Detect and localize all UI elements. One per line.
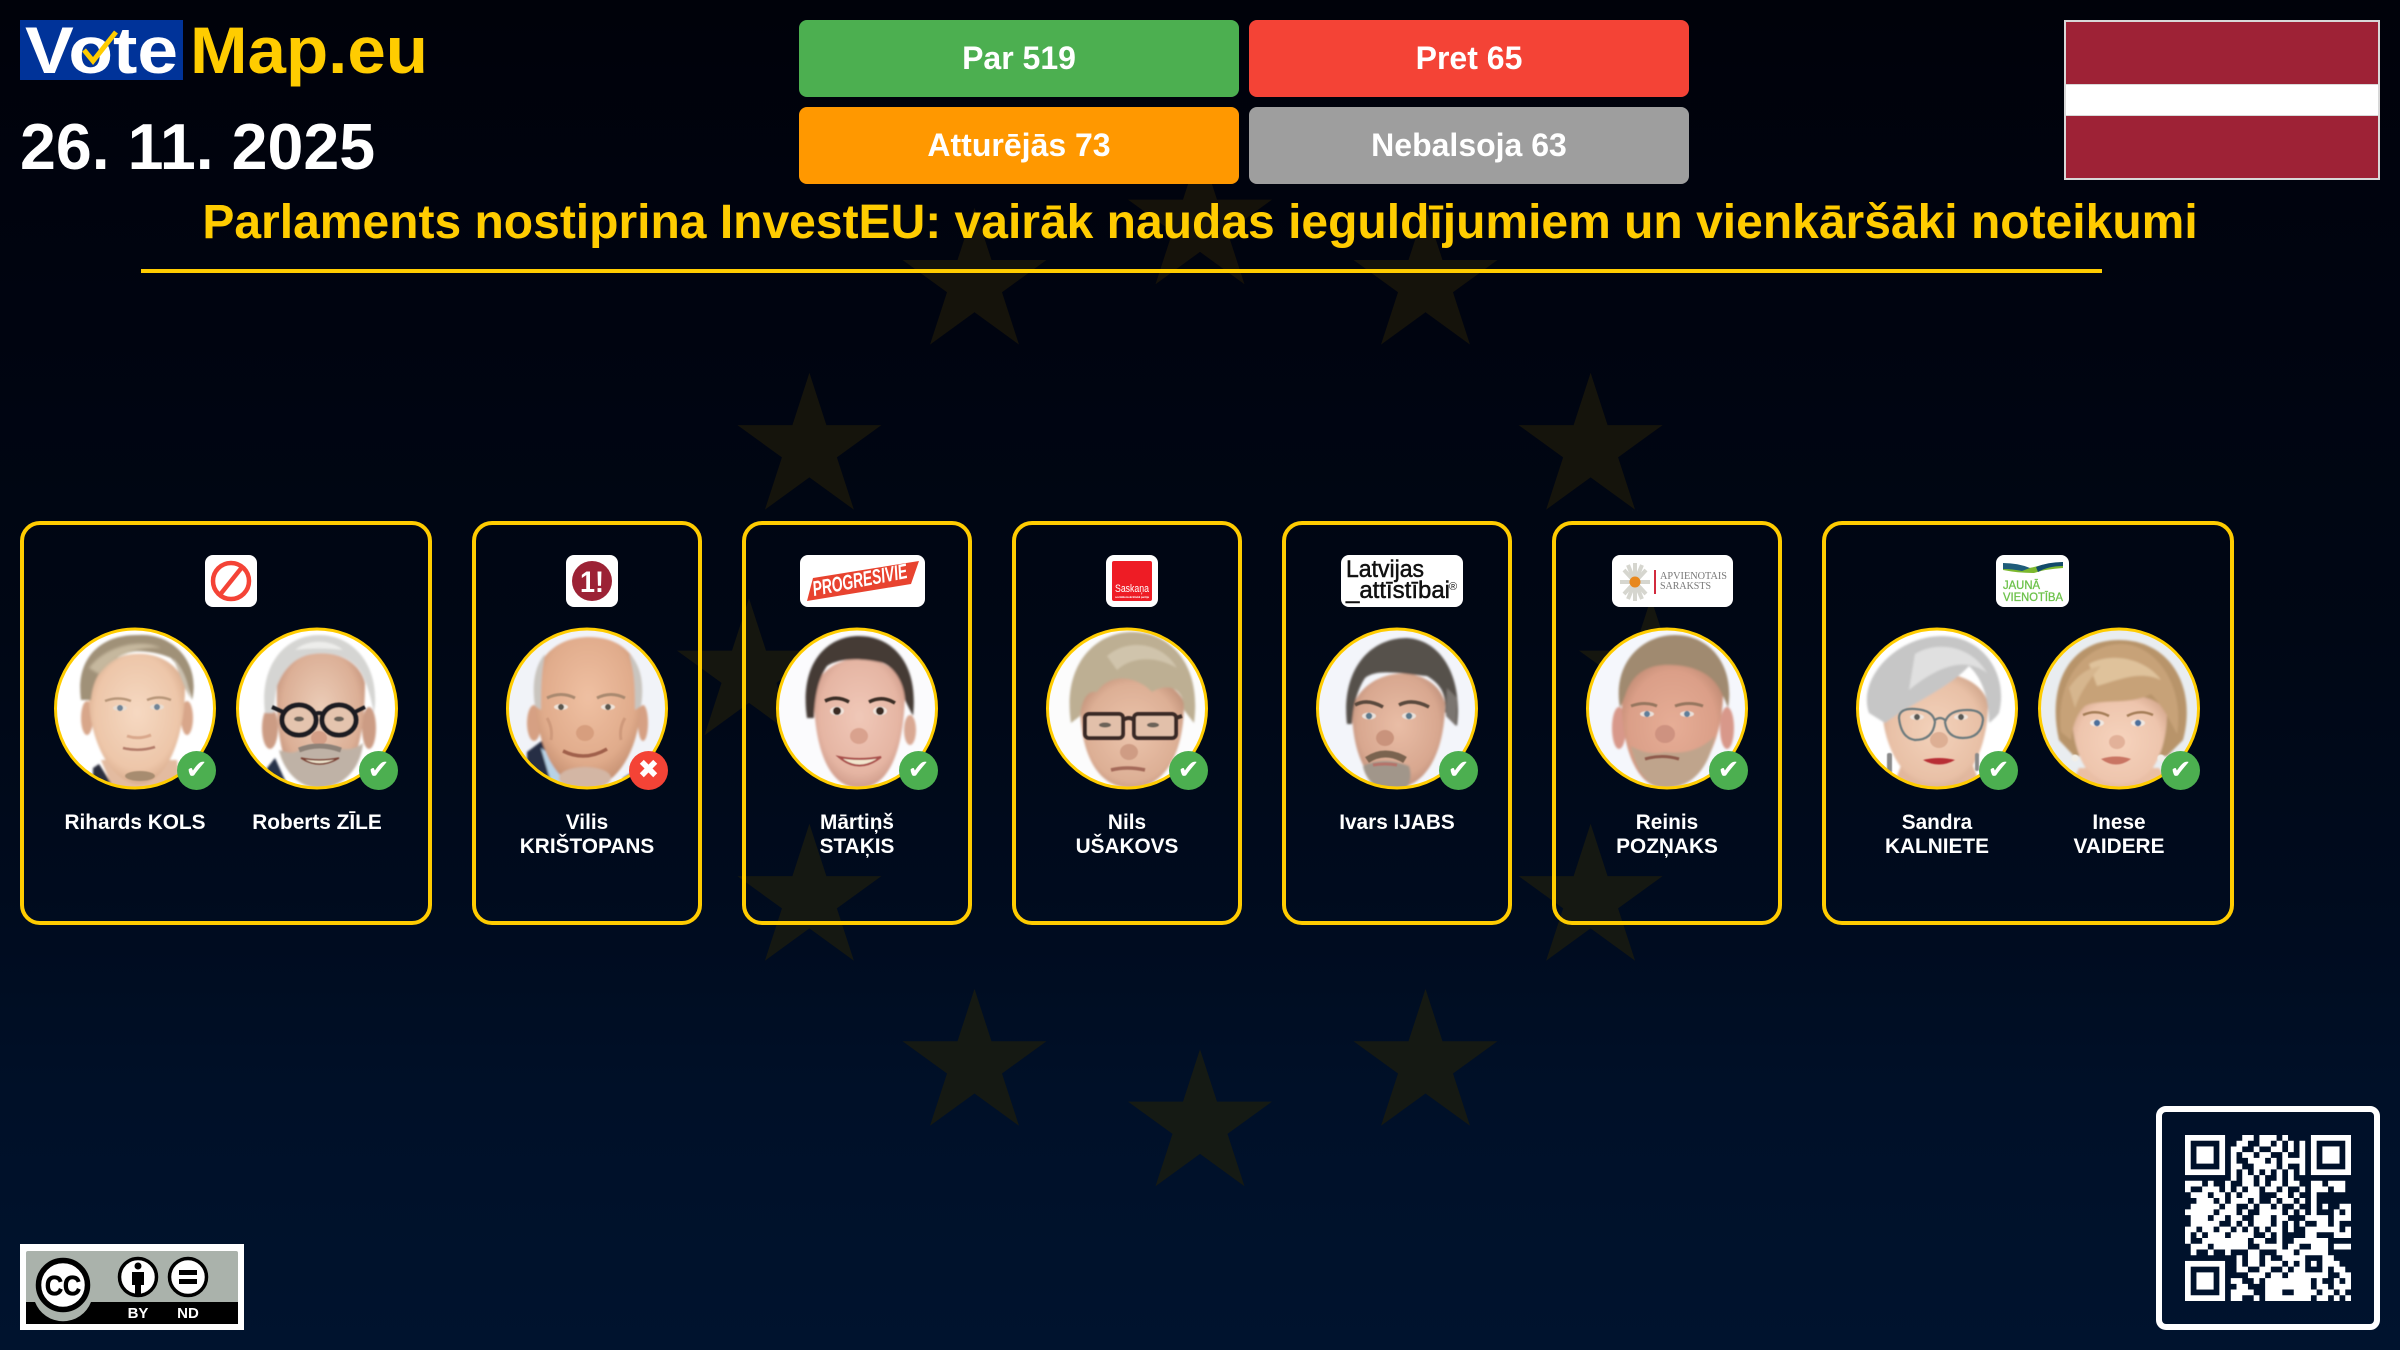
name: Staķis: Mārtiņš [820, 811, 894, 834]
photo: Rihards Kols [54, 628, 216, 790]
vote count: did not vote: Nebalsoja 63 [1371, 127, 1567, 163]
vote count: against [1249, 20, 1689, 97]
license badge: CC BY-ND [20, 1244, 244, 1330]
icon: party logo Latvijas attīstībai: Latvijas [1346, 556, 1424, 583]
icon: party logo Apvienotais saraksts [1612, 555, 1733, 607]
name: Ušakovs [1076, 811, 1178, 858]
vote badge: Vaidere for: ✔ [2170, 755, 2191, 785]
title: Parlaments nostiprina InvestEU: vairāk naudas ieguldījumiem un vienkāršāki noteikumi [202, 196, 2198, 248]
vote badge: Staķis for: ✔ [908, 755, 929, 785]
name: Vaidere [2074, 811, 2164, 858]
flag: Latvia [2064, 20, 2380, 180]
name: Vaidere: VAIDERE [2074, 835, 2164, 858]
vote badge: Ušakovs for [1169, 751, 1208, 790]
icon: party logo Saskaņa [1106, 555, 1158, 607]
name: Krištopans: KRIŠTOPANS [520, 835, 654, 858]
icon: party logo Apvienotais saraksts: SARAKSTS [1660, 581, 1711, 592]
name: Pozņaks: Reinis [1636, 811, 1698, 834]
icon: party logo Latvijas attīstībai: ® [1449, 581, 1457, 593]
name: Ušakovs: Nils [1108, 811, 1146, 834]
vote badge: Vaidere for [2161, 751, 2200, 790]
vote count: for: Par 519 [962, 40, 1076, 76]
vote badge: Kols for [177, 751, 216, 790]
photo: Mārtiņš Staķis [776, 628, 938, 790]
name: Krištopans [520, 811, 654, 858]
panel: Latvia First card [472, 521, 702, 925]
icon: party logo Jaunā Vienotība: JAUNĀ [2003, 578, 2040, 592]
name: Kalniete: KALNIETE [1885, 835, 1989, 858]
name: Staķis: STAĶIS [820, 835, 894, 858]
vote count: abstained: Atturējās 73 [927, 127, 1111, 163]
name: Ijabs: Ivars IJABS [1339, 811, 1455, 834]
panel: Progresīvie card [742, 521, 972, 925]
QR code [2156, 1106, 2380, 1330]
icon: party logo Saskaņa: Saskaņa [1115, 583, 1150, 595]
vote badge: Krištopans against: ✖ [638, 755, 659, 785]
name: Zīle: Roberts ZĪLE [252, 811, 382, 834]
photo: Nils Ušakovs [1046, 628, 1208, 790]
icon: party logo Apvienotais saraksts: APVIENOTAIS [1660, 571, 1727, 582]
name: Krištopans: Vilis [566, 811, 608, 834]
vote badge: Pozņaks for: ✔ [1718, 755, 1739, 785]
date: 26. 11. 2025 [20, 111, 375, 183]
vote count: for [799, 20, 1239, 97]
vote badge: Zīle for: ✔ [368, 755, 389, 785]
icon: party logo Latvia First [566, 555, 618, 607]
license badge: CC BY-ND: ND [177, 1305, 199, 1322]
icon: party logo prohibition sign [205, 555, 257, 607]
icon: party logo Jaunā Vienotība [1996, 555, 2069, 607]
icon: party logo Jaunā Vienotība: VIENOTĪBA [2003, 590, 2063, 604]
vote badge: Zīle for [359, 751, 398, 790]
vote count: did not vote [1249, 107, 1689, 184]
panel: Saskaņa card [1012, 521, 1242, 925]
vote count: abstained [799, 107, 1239, 184]
photo: Ivars Ijabs [1316, 628, 1478, 790]
vote count: against: Pret 65 [1416, 40, 1522, 76]
panel: non-attached card [20, 521, 432, 925]
name: Kols: Rihards KOLS [64, 811, 205, 834]
icon: party logo Latvijas attīstībai [1341, 555, 1463, 607]
panel: Jaunā Vienotība card [1822, 521, 2234, 925]
icon: party logo Latvijas attīstībai: _attīstībai [1345, 577, 1450, 604]
photo: Reinis Pozņaks [1586, 628, 1748, 790]
panel: Latvijas attīstībai card [1282, 521, 1512, 925]
name: Kalniete: Sandra [1902, 811, 1972, 834]
vote badge: Kalniete for [1979, 751, 2018, 790]
vote badge: Pozņaks for [1709, 751, 1748, 790]
panel: Apvienotais saraksts card [1552, 521, 1782, 925]
vote badge: Kols for: ✔ [186, 755, 207, 785]
vote badge: Kalniete for: ✔ [1988, 755, 2009, 785]
vote badge: Ijabs for [1439, 751, 1478, 790]
photo: Sandra Kalniete [1856, 628, 2018, 790]
license badge: CC BY-ND: BY [128, 1305, 148, 1322]
name: Ušakovs: UŠAKOVS [1076, 835, 1178, 858]
name: Vaidere: Inese [2092, 811, 2146, 834]
photo: Inese Vaidere [2038, 628, 2200, 790]
license badge: CC BY-ND: CC [45, 1270, 81, 1301]
vote badge: Ušakovs for: ✔ [1178, 755, 1199, 785]
photo: Roberts Zīle [236, 628, 398, 790]
name: Pozņaks: POZŅAKS [1616, 835, 1718, 858]
name: Pozņaks [1616, 811, 1718, 858]
name: Kalniete [1885, 811, 1989, 858]
vote badge: Krištopans against [629, 751, 668, 790]
icon: party logo Latvia First: 1! [580, 566, 604, 599]
vote badge: Staķis for [899, 751, 938, 790]
icon: party logo Saskaņa: sociāldemokrātiskā partija [1115, 595, 1149, 599]
logo: VoteMap.eu [20, 20, 428, 87]
vote badge: Ijabs for: ✔ [1448, 755, 1469, 785]
photo: Vilis Krištopans [506, 628, 668, 790]
name: Staķis [820, 811, 894, 858]
